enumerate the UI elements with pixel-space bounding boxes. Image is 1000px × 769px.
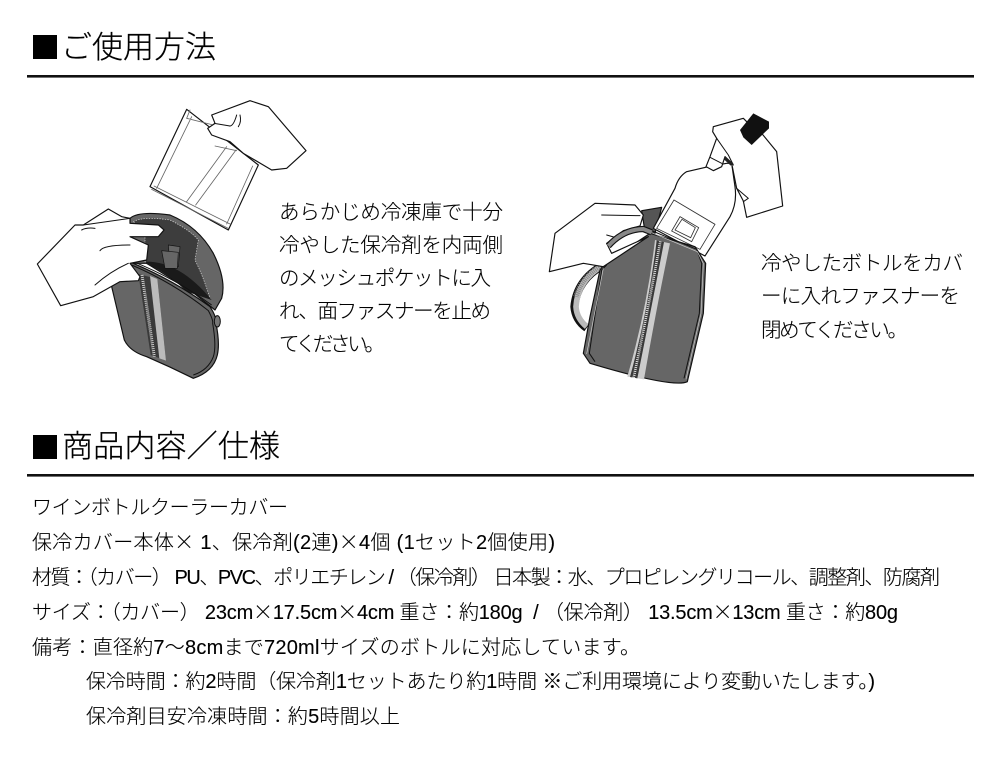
specification text: 保冷時間：約2時間（保冷剤1セットあたり約1時間 ※ご利用環境により変動いたします。)	[86, 670, 875, 693]
hand holding bottle	[706, 113, 783, 217]
bottle	[653, 163, 736, 256]
instruction text 2: 閉めてください。	[761, 319, 908, 342]
hand holding ice pack	[208, 101, 306, 170]
ice pack	[150, 109, 258, 230]
instruction text 1: のメッシュポケットに入	[279, 267, 491, 290]
instruction text 2: ーに入れファスナーを	[761, 285, 960, 308]
specification text: 保冷剤目安冷凍時間：約5時間以上	[86, 705, 400, 728]
cover open back	[130, 213, 223, 310]
specification text: 材質：（カバー） PU、PVC、ポリエチレン / （保冷剤） 日本製：水、プロピレングリコール、調整剤、防腐剤	[32, 566, 940, 589]
hand holding cover	[549, 203, 652, 272]
icon: heading square	[33, 35, 57, 59]
cover body	[583, 230, 706, 383]
handle	[574, 265, 603, 328]
instruction text 1: 冷やした保冷剤を内両側	[279, 234, 503, 257]
instruction text 1: てください。	[279, 333, 385, 356]
specification text: 保冷カバー本体× 1、保冷剤(2連)×4個 (1セット2個使用)	[32, 526, 555, 555]
instruction text 2: 冷やしたボトルをカバ	[761, 252, 963, 275]
illustration: inserting ice packs into the cover	[37, 101, 306, 378]
cover front flap	[112, 262, 220, 378]
specification text: 備考：直径約7～8cmまで720mlサイズのボトルに対応しています。	[32, 636, 640, 659]
specification text	[32, 497, 940, 728]
icon: heading square	[33, 435, 57, 459]
hand holding cover	[37, 209, 164, 306]
instruction text 2	[761, 252, 963, 342]
heading: contents and specifications: 商品内容／仕様	[62, 429, 280, 464]
specification text: ワインボトルクーラーカバー	[32, 497, 288, 519]
specification text: サイズ：（カバー） 23cm×17.5cm×4cm 重さ：約180g / （保冷剤） 13.5cm×13cm 重さ：約80g	[32, 596, 898, 625]
instruction text 1: あらかじめ冷凍庫で十分	[279, 201, 503, 224]
illustration: inserting bottle into the cover	[549, 113, 783, 383]
heading: usage: ご使用方法	[61, 30, 216, 65]
instruction text 1: れ、面ファスナーを止め	[279, 300, 491, 323]
cover back	[642, 207, 662, 233]
instruction text 1	[279, 201, 503, 356]
